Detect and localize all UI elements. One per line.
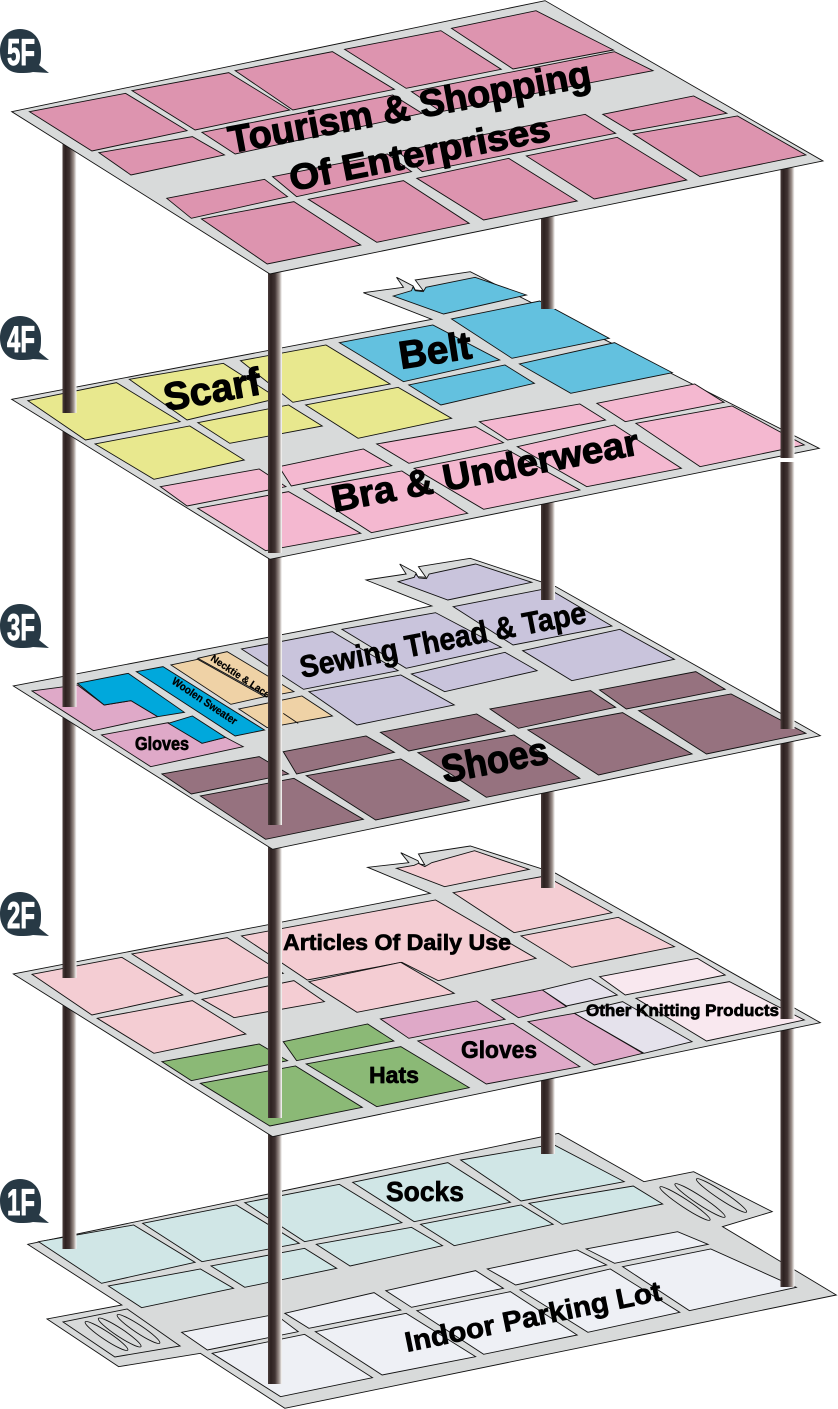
label: Gloves: Gloves xyxy=(461,1037,537,1064)
floor 2F xyxy=(13,846,820,1137)
label: Woolen Sweater: Woolen Sweater xyxy=(169,676,240,728)
pillars between 1F and 2F xyxy=(62,960,794,1384)
floor 1F xyxy=(28,1133,836,1408)
5F platform and shops xyxy=(12,1,823,274)
floor 5F xyxy=(12,1,823,274)
floor tag: 2F: 2F xyxy=(7,895,35,936)
pillars between 4F and 5F xyxy=(62,140,794,553)
floor tag: 3F: 3F xyxy=(7,607,35,648)
pillars between 3F and 4F xyxy=(62,425,794,825)
label: Scarf: Scarf xyxy=(160,360,265,420)
4F platform and shops xyxy=(12,272,819,559)
label: Other Knitting Products: Other Knitting Products xyxy=(586,1001,779,1020)
floor tag: 1F: 1F xyxy=(7,1182,35,1223)
floor tag: 4F: 4F xyxy=(7,319,35,360)
label: Necktie & Lace: Necktie & Lace xyxy=(208,653,272,701)
label: Gloves: Gloves xyxy=(135,734,189,754)
label: Sewing Thead & Tape: Sewing Thead & Tape xyxy=(297,595,589,685)
1F platform and shops xyxy=(28,1133,836,1408)
label: Shoes: Shoes xyxy=(438,730,552,792)
floor 3F xyxy=(13,558,820,849)
pillars between 2F and 3F xyxy=(62,700,794,1118)
label: Tourism & Shopping: Tourism & Shopping xyxy=(225,53,594,162)
label: Indoor Parking Lot: Indoor Parking Lot xyxy=(402,1275,664,1358)
label: Socks: Socks xyxy=(386,1176,464,1207)
left ramp ellipses xyxy=(83,1312,162,1353)
3F platform and shops xyxy=(13,558,820,849)
floor tag: 5F: 5F xyxy=(7,32,35,73)
label: Belt: Belt xyxy=(396,324,475,378)
2F platform and shops xyxy=(13,846,820,1137)
label: Of Enterprises: Of Enterprises xyxy=(286,108,554,199)
right ramp ellipses xyxy=(658,1176,749,1223)
label: Articles Of Daily Use: Articles Of Daily Use xyxy=(283,930,511,955)
label: Bra & Underwear: Bra & Underwear xyxy=(328,422,642,520)
label: Hats: Hats xyxy=(369,1062,419,1088)
floor 4F xyxy=(12,272,819,559)
